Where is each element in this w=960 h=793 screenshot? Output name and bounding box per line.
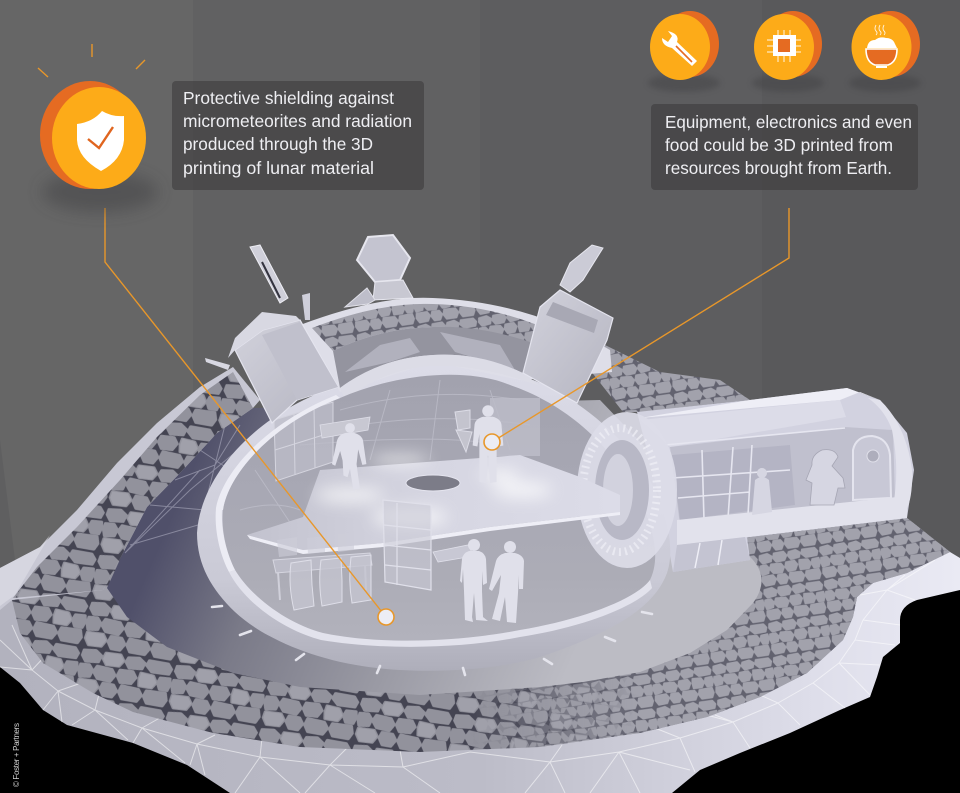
icon: wrench coin <box>648 11 720 92</box>
text box: printed equipment: resources brought from Earth. <box>665 158 892 178</box>
interior back wall grid <box>240 380 530 530</box>
upper deck slab <box>247 455 620 554</box>
dome stone arch and glass band <box>300 298 612 400</box>
callout line: shielding <box>105 208 394 625</box>
deck light glows <box>315 455 552 526</box>
text box: shielding <box>172 81 424 190</box>
solar panel left <box>205 245 338 423</box>
back partition and workstation <box>455 398 540 456</box>
connecting tunnel module <box>637 388 914 572</box>
figure: person lower left <box>460 539 488 622</box>
text box: printed equipment: food could be 3D printed from <box>665 135 893 155</box>
anchoring spikes under the dome <box>212 606 652 675</box>
text box: printed equipment: Equipment, electronics and even <box>665 112 912 132</box>
people standing in dome <box>332 405 524 623</box>
callout dot: shielding <box>378 609 394 625</box>
text box: shielding: printing of lunar material <box>183 158 374 178</box>
icon: microchip coin <box>752 11 824 92</box>
icon: shield coin <box>38 44 158 212</box>
deck hatch opening <box>406 475 460 491</box>
image credit: © Foster + Partners <box>12 723 21 787</box>
dome interior <box>223 375 655 641</box>
bowl glyph <box>867 37 897 48</box>
lower deck low table <box>433 545 474 562</box>
left shell wing with stone layer <box>0 367 260 610</box>
shield glyph <box>77 111 124 171</box>
top desk <box>320 417 370 438</box>
dome end ring toward tunnel <box>577 412 677 568</box>
text box: shielding: produced through the 3D <box>183 134 373 154</box>
right stone hump behind the tube <box>590 345 750 412</box>
hexagonal antenna panel <box>345 235 413 307</box>
callout dot: printed equipment <box>484 434 500 450</box>
central shelf unit <box>383 500 431 590</box>
dome outer shell <box>197 365 670 671</box>
upper equipment shelves <box>274 402 333 481</box>
callout line: printed equipment <box>484 208 789 450</box>
figure: person upper right <box>473 405 503 483</box>
figure: astronaut in tunnel <box>806 450 845 505</box>
solar panel right <box>523 245 613 403</box>
chip glyph <box>767 30 801 62</box>
cobbled regolith stone ring <box>12 500 950 752</box>
dining table and chairs <box>273 532 372 610</box>
figure: person upper left <box>332 423 366 490</box>
text box: shielding: Protective shielding against <box>183 88 394 108</box>
icon: rice bowl coin <box>849 11 921 92</box>
excavated floor ring around the dome <box>107 400 762 695</box>
figure: person lower right <box>489 541 524 623</box>
lunar terrain base with triangular mesh <box>0 500 960 793</box>
dome lower rim highlight <box>229 570 652 647</box>
sparkle rays <box>38 44 145 77</box>
text box: printed equipment <box>651 104 918 190</box>
support web mesh under the wing <box>125 425 250 553</box>
black void under the terrain <box>0 588 960 793</box>
text box: shielding: micrometeorites and radiation <box>183 111 412 131</box>
figure: person in tunnel <box>752 468 772 515</box>
wrench glyph <box>662 31 697 66</box>
